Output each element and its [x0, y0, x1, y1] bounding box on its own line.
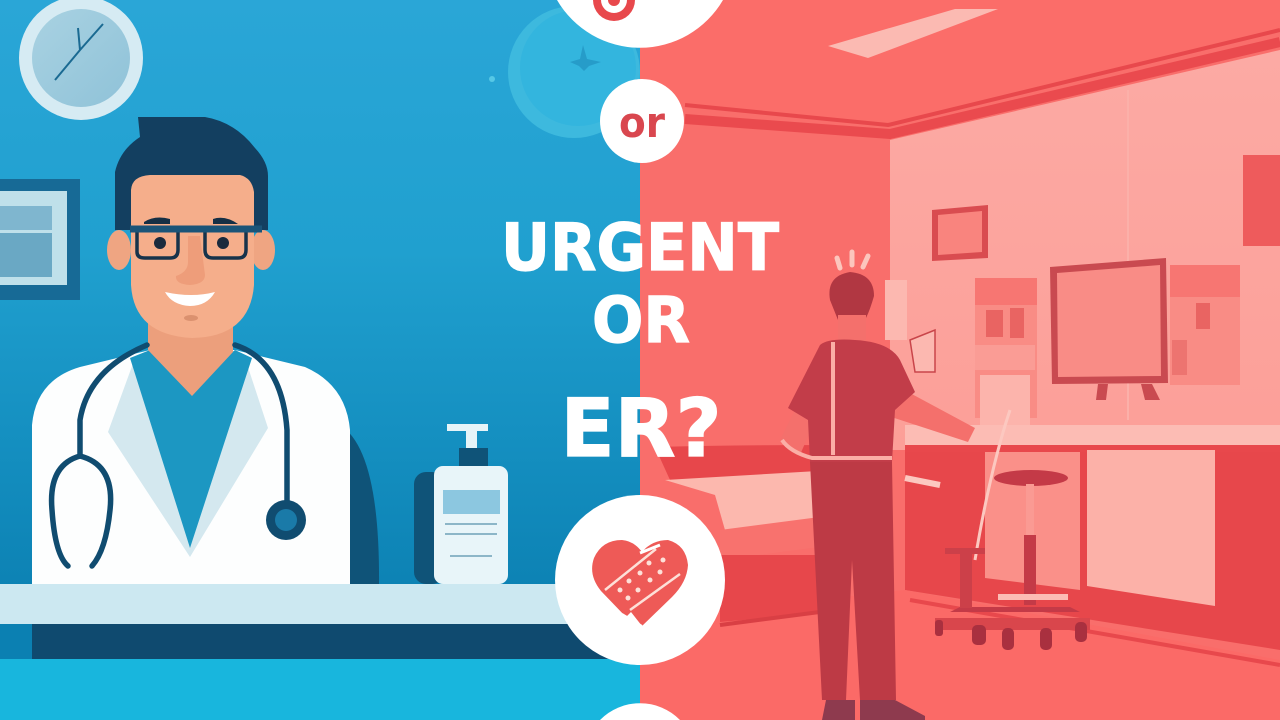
- ears: [107, 230, 131, 270]
- icon: faint background clock: [489, 6, 640, 138]
- shoes: [822, 700, 925, 720]
- stethoscope: [52, 345, 287, 566]
- badge: or: or: [619, 98, 665, 147]
- left wall chart: [975, 278, 1037, 435]
- icon: heart: [592, 540, 688, 626]
- monitor: [1050, 258, 1168, 400]
- stool: [935, 470, 1090, 650]
- coat: [32, 350, 350, 584]
- medical equipment: [905, 410, 1010, 560]
- title: [501, 211, 779, 475]
- hair and head: [829, 272, 874, 327]
- doctor illustration: [32, 117, 379, 584]
- scrubs V: [130, 350, 252, 548]
- forearm: [885, 385, 975, 442]
- ceiling light: [828, 9, 998, 58]
- hair: [115, 117, 268, 232]
- wall picture: [932, 205, 988, 261]
- lapels: [108, 358, 268, 557]
- icon: wall clock: [19, 0, 143, 120]
- nurse figure: [780, 252, 975, 720]
- title: OR: [592, 284, 690, 357]
- back arm: [780, 400, 815, 455]
- counter: [0, 584, 622, 659]
- back wall: [890, 50, 1280, 450]
- right wall chart: [1170, 265, 1240, 385]
- badge: heart bandage: [555, 495, 725, 665]
- icon: wall picture: [0, 179, 80, 300]
- nose: [176, 236, 205, 285]
- pain marks: [837, 252, 868, 268]
- panel: red ER side: [640, 0, 1280, 720]
- glasses: [137, 232, 246, 258]
- floor: [640, 590, 1280, 720]
- panel: blue urgent care side: [0, 0, 640, 720]
- title: ER?: [560, 382, 722, 475]
- scrub stripe: [782, 342, 892, 458]
- red wall panel: [1243, 155, 1280, 246]
- small wall notes: [885, 280, 935, 372]
- shirt: [788, 340, 915, 462]
- face: [131, 175, 254, 338]
- ceiling trim: [685, 30, 1280, 134]
- badge: or: [600, 79, 684, 163]
- bed: [655, 445, 835, 625]
- title: URGENT: [501, 211, 779, 286]
- neck: [838, 315, 866, 345]
- badge: bottom partial circle: [600, 703, 680, 720]
- chin shadow: [184, 315, 198, 321]
- smile: [165, 292, 215, 306]
- chair back: [330, 425, 379, 584]
- ceiling: [640, 0, 1280, 125]
- trousers: [810, 462, 896, 700]
- eyebrows: [144, 218, 238, 224]
- icon: sanitizer bottle: [414, 424, 508, 584]
- eyes: [154, 237, 229, 249]
- counter: [905, 425, 1280, 650]
- neck: [148, 320, 233, 396]
- icon: bandage on heart: [605, 545, 680, 626]
- badge: top target icon: [557, 0, 723, 48]
